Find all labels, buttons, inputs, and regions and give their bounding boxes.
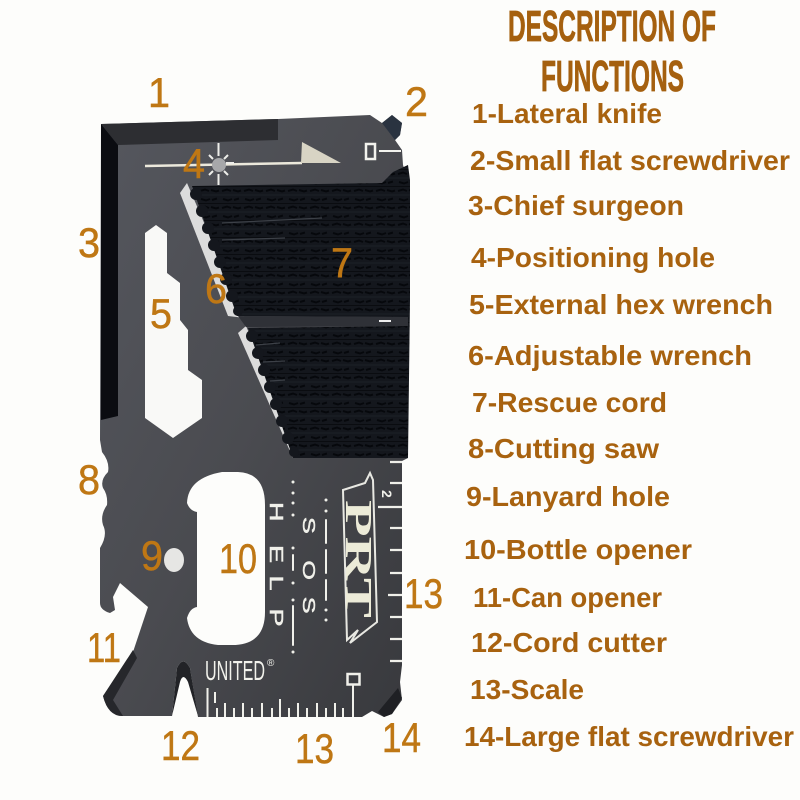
rescue cord	[192, 165, 410, 458]
number 7: 7	[331, 239, 353, 286]
item 2: 2-Small flat screwdriver	[470, 145, 790, 176]
cord cutter bevel	[172, 662, 198, 716]
chief surgeon blade	[101, 124, 118, 420]
lanyard hole	[164, 548, 184, 572]
can opener edge bevel	[103, 650, 137, 716]
item 12: 12-Cord cutter	[471, 627, 667, 658]
number 13 bottom: 13	[295, 725, 334, 772]
card body	[100, 115, 408, 717]
adjustable wrench slots	[180, 183, 304, 458]
tool card	[100, 115, 410, 717]
positioning hole star	[209, 143, 234, 185]
item 4: 4-Positioning hole	[471, 242, 715, 273]
UNITED mark	[205, 655, 275, 686]
engraved dotted lines	[293, 482, 326, 652]
number 3: 3	[78, 219, 100, 266]
item 14: 14-Large flat screwdriver	[464, 721, 794, 752]
cord strand highlights	[222, 218, 408, 381]
item 11: 11-Can opener	[473, 582, 662, 613]
UNITED mark: UNITED	[205, 655, 265, 686]
number 14: 14	[382, 714, 421, 761]
number 1: 1	[148, 69, 170, 116]
number 5: 5	[150, 290, 172, 337]
cord scalloped edges	[190, 188, 299, 457]
item 9: 9-Lanyard hole	[466, 481, 670, 512]
bottom scale ticks	[208, 674, 360, 717]
HELP engraving: HELP	[266, 502, 286, 627]
lateral knife bevel	[101, 119, 278, 145]
item 8: 8-Cutting saw	[468, 433, 659, 464]
number 4: 4	[183, 140, 205, 187]
right scale ticks: 2	[379, 490, 395, 498]
item 10: 10-Bottle opener	[464, 534, 692, 565]
function list	[464, 98, 794, 752]
PRT logo: PRT	[337, 500, 379, 618]
item 7: 7-Rescue cord	[472, 387, 667, 418]
number 6: 6	[205, 265, 227, 312]
number 9: 9	[141, 532, 163, 579]
number 13 right: 13	[404, 570, 443, 617]
zero mark top	[366, 144, 401, 159]
item 5: 5-External hex wrench	[469, 289, 773, 320]
SOS engraving: SOS	[299, 517, 319, 614]
right scale ticks	[378, 462, 402, 661]
number 12: 12	[161, 722, 200, 769]
title: FUNCTIONS	[541, 52, 684, 101]
external hex wrench opening	[145, 225, 202, 438]
large flat screwdriver tip	[378, 688, 402, 717]
small flat screwdriver tip	[382, 115, 402, 140]
number 2: 2	[405, 78, 428, 125]
number 10: 10	[219, 535, 257, 582]
item 6: 6-Adjustable wrench	[468, 340, 752, 371]
number labels on the tool	[78, 69, 443, 772]
number 11: 11	[87, 624, 121, 671]
title	[508, 2, 716, 101]
PRT logo	[337, 473, 379, 643]
UNITED mark: ®	[267, 658, 275, 669]
sight line and triangle	[145, 142, 341, 166]
item 3: 3-Chief surgeon	[468, 190, 684, 221]
bottle opener	[187, 472, 265, 645]
item 13: 13-Scale	[470, 674, 584, 705]
item 1: 1-Lateral knife	[472, 98, 662, 129]
number 8: 8	[78, 456, 100, 503]
